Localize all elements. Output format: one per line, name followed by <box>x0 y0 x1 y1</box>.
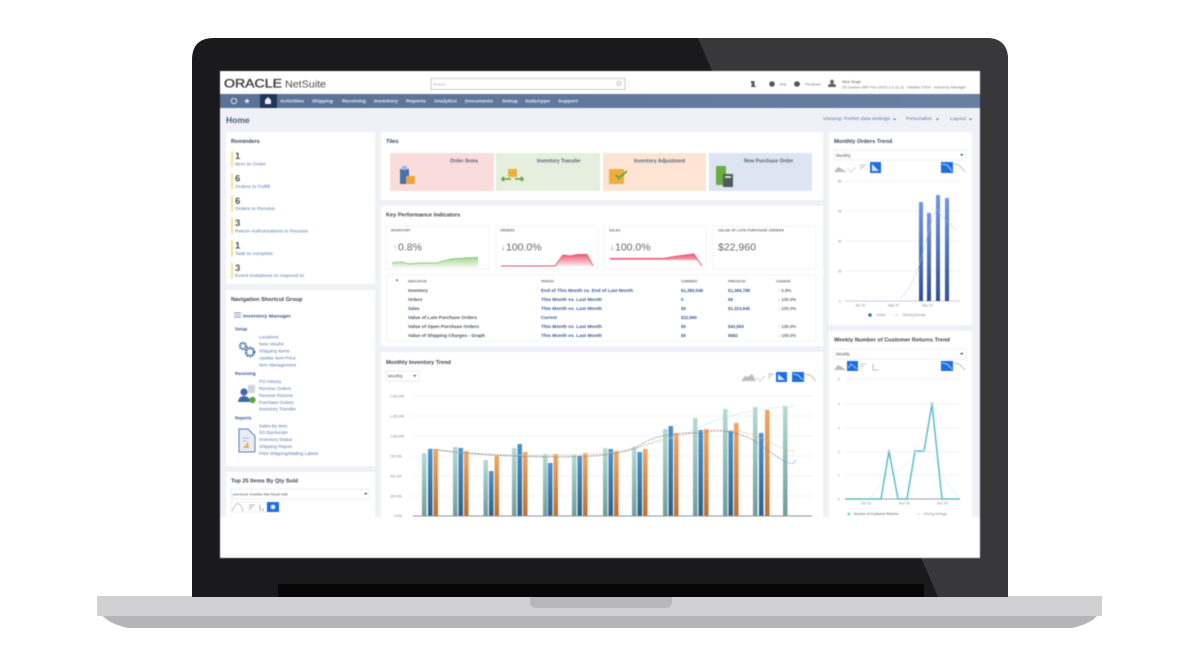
KPI card: inventory: 0.8% <box>398 242 422 254</box>
navigation bar: Activities <box>280 98 304 104</box>
tile: inventory adjustment <box>603 153 706 191</box>
bar chart: 20 <box>838 270 842 274</box>
bar chart: Jan '20 <box>855 304 865 308</box>
panel: reminders: Task to complete <box>235 251 273 256</box>
panel: reminders: 3 <box>235 263 240 274</box>
panel: navigation shortcut group: Receive Orders <box>259 386 292 391</box>
line chart: Dec '20 <box>937 502 948 506</box>
line chart: 4 <box>838 402 840 406</box>
logo: ORACLE <box>224 78 282 90</box>
panel: reminders: Return Authorizations to Receive <box>235 228 308 234</box>
KPI card: sales: SALES <box>609 228 621 232</box>
KPI table: ↓ 100.0% <box>778 306 796 311</box>
bar chart: 750,00K <box>390 454 403 458</box>
bar chart: 250,00K <box>390 494 403 498</box>
navigation bar: Reports <box>406 98 426 104</box>
laptop base <box>97 596 1102 628</box>
panel: navigation shortcut group <box>226 290 375 466</box>
panel: reminders: Reminders <box>231 139 260 145</box>
KPI table: $0 <box>681 324 686 329</box>
KPI card: sales: 100.0% <box>615 242 651 254</box>
panel: key performance indicators: Key Performance Indicators <box>386 212 460 218</box>
line chart: 3 <box>838 426 840 430</box>
KPI card: inventory: ↑ <box>393 243 397 252</box>
panel: navigation shortcut group: Print Shipping/Mailing Labels <box>259 451 319 456</box>
KPI table: ↑ 0.8% <box>778 288 792 293</box>
panel: reminders: 1 <box>235 240 241 252</box>
header bar <box>224 78 967 90</box>
panel: tiles: Tiles <box>386 139 399 145</box>
KPI card: sales <box>604 226 706 269</box>
tile: new purchase order <box>709 153 812 191</box>
panel: navigation shortcut group: Purchase Orders <box>259 400 294 405</box>
bar chart: 80 <box>838 180 842 184</box>
page options: Personalize <box>906 116 932 121</box>
icon: gears <box>240 343 254 356</box>
navigation bar: Shipping <box>312 98 333 104</box>
panel: navigation shortcut group: Reports <box>235 416 252 420</box>
legend: Moving Average <box>924 512 947 516</box>
chart type buttons <box>741 372 816 382</box>
bar chart: 0.00K <box>394 514 403 518</box>
icon: report document <box>239 429 255 452</box>
navigation bar <box>220 94 980 108</box>
laptop lid <box>192 38 1008 597</box>
panel: navigation shortcut group: Receiving <box>235 371 256 376</box>
chart type buttons <box>834 162 965 173</box>
logo <box>224 78 326 90</box>
navigation bar: Analytics <box>434 98 457 104</box>
line chart <box>838 378 960 506</box>
KPI table <box>387 275 816 341</box>
legend: Orders <box>876 313 886 317</box>
KPI table: Orders <box>408 297 423 302</box>
panel: weekly customer returns trend: Weekly Number of Customer Returns Trend <box>834 338 950 344</box>
KPI table: This Month vs. Last Month <box>541 333 602 338</box>
KPI table: $682 <box>728 333 738 338</box>
KPI table: Current <box>541 315 557 320</box>
logo: NetSuite <box>285 78 326 90</box>
panel: navigation shortcut group: Update Item Price <box>259 355 296 360</box>
panel: navigation shortcut group: Item Management <box>259 362 297 367</box>
panel: monthly inventory trend: Monthly Inventory Trend <box>386 360 452 366</box>
panel: monthly inventory trend <box>381 352 823 518</box>
teal bars <box>422 406 788 516</box>
white fade below dashboard <box>220 517 980 558</box>
bar chart: 60 <box>838 210 842 214</box>
legend: Moving Average <box>903 313 926 317</box>
panel: navigation shortcut group: Sales By Item <box>259 423 288 428</box>
KPI table: $0 <box>681 306 686 311</box>
panel: monthly orders trend: Monthly <box>836 153 852 158</box>
panel: navigation shortcut group: PO History <box>259 379 282 384</box>
panel: navigation shortcut group: New Vendor <box>259 342 284 346</box>
panel: monthly inventory trend: Monthly <box>388 374 404 378</box>
bar chart: 1,500,00K <box>390 394 405 398</box>
panel: navigation shortcut group: Receive Returns <box>259 393 294 398</box>
tile: new purchase order: New Purchase Order <box>744 158 793 164</box>
page heading: Home <box>226 115 250 125</box>
panel: reminders: Event Invitations to respond to <box>235 273 304 278</box>
KPI table: $22,960 <box>681 315 697 320</box>
KPI table: $1,369,788 <box>728 288 751 293</box>
page options: Layout <box>950 116 967 121</box>
KPI card: value of late purchase orders <box>713 226 816 269</box>
bar chart: 40 <box>838 240 842 244</box>
KPI table: ↓ 100.0% <box>778 297 796 302</box>
KPI table: $0 <box>681 333 686 338</box>
panel: reminders: 1 <box>235 151 241 162</box>
panel: key performance indicators <box>381 206 823 346</box>
KPI table: CHANGE <box>776 280 791 284</box>
navigation bar: Support <box>558 98 578 104</box>
panel: navigation shortcut group: Shipping Items <box>259 348 290 353</box>
trend lines <box>430 406 795 464</box>
KPI table: End of This Month vs. End of Last Month <box>541 288 633 293</box>
tile: inventory adjustment: Inventory Adjustment <box>634 158 686 164</box>
panel: navigation shortcut group: Inventory Transfer <box>259 406 296 412</box>
panel: tiles <box>381 132 823 200</box>
KPI card: orders: 100.0% <box>506 242 542 254</box>
KPI table: Value of Late Purchase Orders <box>408 315 478 320</box>
tile: inventory transfer: Inventory Transfer <box>537 158 581 164</box>
panel: weekly customer returns trend <box>829 331 972 517</box>
user tools <box>751 79 967 90</box>
panel: reminders <box>226 132 375 284</box>
KPI table: PERIOD <box>541 280 555 284</box>
blue bars <box>428 426 764 516</box>
navigation bar: Documents <box>465 98 493 104</box>
KPI card: inventory <box>386 226 489 269</box>
tile: inventory transfer <box>496 153 600 191</box>
panel: navigation shortcut group: SO Backorder <box>259 430 288 435</box>
chart type buttons <box>834 361 965 371</box>
panel: top 25 items: previous months this fiscal half <box>233 492 288 496</box>
bar chart: May '20 <box>888 304 899 308</box>
navigation bar: Receiving <box>342 98 366 104</box>
user tools: SS Dueker WIP Full v2020.2.0.11.11 - NABAK 07EA - Inventory Manager <box>842 86 967 90</box>
bar chart: 0 <box>839 300 841 304</box>
line chart: 2 <box>838 450 840 454</box>
KPI table: 69 <box>728 297 733 302</box>
bar chart: 1,000,00K <box>390 434 405 438</box>
panel: reminders: 6 <box>235 174 240 184</box>
user tools: Nick Singh <box>842 79 861 84</box>
line chart: 0 <box>838 498 840 502</box>
KPI card: orders: ↓ <box>501 243 505 252</box>
panel: monthly orders trend <box>829 132 972 325</box>
KPI card: sales: ↓ <box>610 243 614 252</box>
KPI card: value of late purchase orders: $22,960 <box>718 242 756 254</box>
navigation bar: ★ <box>244 96 251 106</box>
panel: navigation shortcut group: Inventory Manager <box>243 314 291 318</box>
KPI table: ↓ 100.0% <box>778 324 796 329</box>
KPI table: Inventory <box>408 288 428 293</box>
orange bars <box>434 410 770 516</box>
bar chart: 500,00K <box>390 474 403 478</box>
panel: top 25 items <box>226 472 375 517</box>
KPI card: value of late purchase orders: VALUE OF LATE PURCHASE ORDERS <box>718 228 785 232</box>
legend <box>848 512 947 516</box>
page options: Viewing: Portlet data settings <box>823 116 891 121</box>
line chart: Nov '20 <box>899 502 910 506</box>
line chart: 1 <box>838 474 840 478</box>
tile: order items <box>390 153 494 191</box>
KPI table: Value of Shipping Charges - Graph <box>408 333 485 338</box>
panel: reminders: Orders to Receive <box>235 206 275 211</box>
bar chart <box>838 180 960 308</box>
KPI table: This Month vs. Last Month <box>541 324 602 329</box>
panel: reminders: Item to Order <box>235 162 267 166</box>
KPI table: PREVIOUS <box>728 280 746 284</box>
bar chart <box>390 394 812 518</box>
navigation bar: Setup <box>502 98 518 104</box>
line chart: 5 <box>838 378 840 382</box>
KPI table: $1,380,548 <box>681 288 704 293</box>
tile: order items: Order Items <box>450 158 478 164</box>
panel: navigation shortcut group: Setup <box>235 326 248 332</box>
screen <box>220 71 980 558</box>
search box <box>431 78 625 90</box>
panel: monthly orders trend: Monthly Orders Trend <box>834 139 893 145</box>
user tools: Feedback <box>805 82 821 86</box>
navigation bar: Inventory <box>374 98 398 104</box>
legend: Number of Customer Returns <box>854 512 899 516</box>
panel: top 25 items: Top 25 Items By Qty Sold <box>231 478 299 484</box>
panel: navigation shortcut group: Shipping Report <box>259 444 293 449</box>
page options <box>823 116 972 121</box>
panel: navigation shortcut group: Locations <box>259 334 279 340</box>
line chart: Oct '20 <box>861 502 871 506</box>
search box: Search <box>433 82 446 86</box>
bar chart: 1,250,00K <box>390 414 405 418</box>
panel: navigation shortcut group: Inventory Status <box>259 437 293 442</box>
KPI table: Value of Open Purchase Orders <box>408 324 480 329</box>
KPI table: CURRENT <box>681 280 699 284</box>
KPI table: INDICATOR <box>408 280 427 284</box>
navigation bar: SuiteApps <box>525 98 550 104</box>
legend <box>868 313 926 317</box>
KPI table: $1,323,645 <box>728 306 751 311</box>
KPI table: 0 <box>681 297 684 302</box>
panel: weekly customer returns trend: Weekly <box>836 352 851 356</box>
KPI table: $42,593 <box>728 324 744 329</box>
KPI table: This Month vs. Last Month <box>541 297 602 302</box>
panel: reminders: 3 <box>235 218 240 229</box>
panel: reminders: Orders to Fulfill <box>235 184 270 189</box>
KPI card: orders <box>496 226 598 269</box>
KPI table: ↓ 100.0% <box>778 333 796 338</box>
KPI card: orders: ORDERS <box>500 228 515 232</box>
KPI card: inventory: INVENTORY <box>391 228 411 232</box>
KPI table: Sales <box>408 306 420 311</box>
panel: navigation shortcut group: Navigation Shortcut Group <box>231 297 303 303</box>
KPI table: This Month vs. Last Month <box>541 306 602 311</box>
user tools: Help <box>779 82 786 86</box>
bar chart: Sep '20 <box>922 304 933 308</box>
icon: users with check <box>238 385 256 403</box>
panel: reminders: 6 <box>235 196 240 207</box>
